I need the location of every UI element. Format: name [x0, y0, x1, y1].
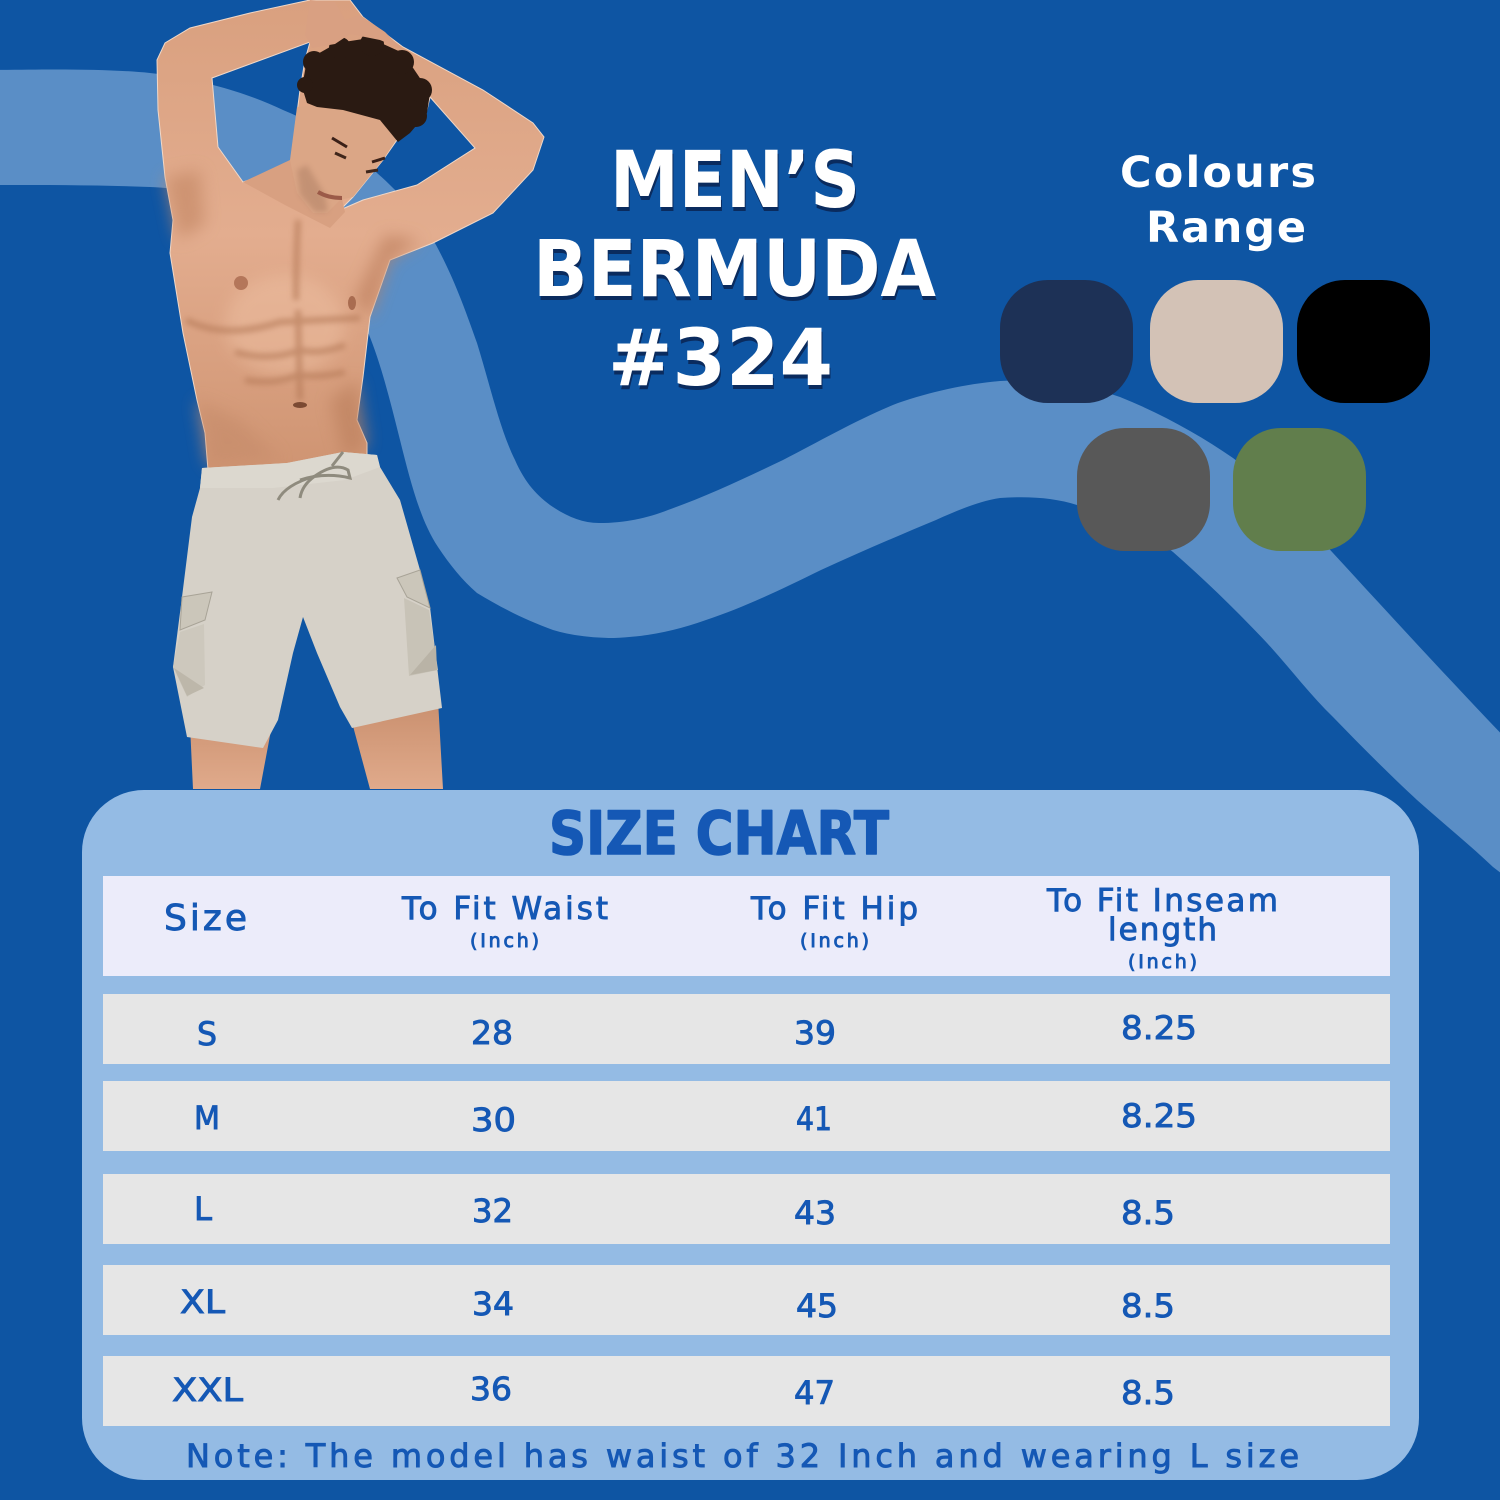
note: Note: The model has waist of 32 Inch and wearing L size — [186, 1437, 1299, 1475]
title text: #324 — [608, 314, 833, 404]
row: XL — [103, 1265, 1390, 1335]
row: S: 39 — [794, 1014, 836, 1052]
swatch: black — [1297, 280, 1430, 403]
row: XL: XL — [180, 1283, 225, 1321]
row: XXL — [103, 1356, 1390, 1426]
swatch: green — [1233, 428, 1366, 551]
title text: MEN’S — [610, 136, 860, 226]
nipples and navel — [234, 276, 356, 408]
colours range heading — [1120, 148, 1316, 253]
title shadow: #324 — [609, 318, 834, 408]
row: XXL: 36 — [470, 1370, 512, 1408]
panel background — [82, 790, 1419, 1480]
row: XL: 8.5 — [1121, 1287, 1175, 1325]
model figure in cargo shorts — [157, 0, 544, 789]
row: S — [103, 994, 1390, 1064]
swatch: navy — [1000, 280, 1133, 403]
table header row: To Fit Hip — [750, 891, 918, 927]
size chart heading: SIZE CHART — [549, 799, 889, 869]
colour swatches — [1000, 280, 1430, 551]
neck — [243, 160, 345, 228]
facial features — [297, 138, 385, 212]
decorative wave band — [0, 69, 1500, 880]
table header row: To Fit Inseam — [1046, 883, 1278, 919]
title shadow: MEN’S — [611, 140, 861, 230]
title — [533, 136, 937, 408]
face — [290, 103, 398, 213]
row: XL: 45 — [796, 1287, 838, 1325]
row: S: 8.25 — [1121, 1009, 1197, 1047]
waistband — [200, 452, 380, 488]
row: M: 8.25 — [1121, 1097, 1197, 1135]
table header row: Size — [164, 898, 247, 939]
title shadow: BERMUDA — [534, 229, 937, 319]
row: L: 43 — [794, 1194, 836, 1232]
table header row: (Inch) — [470, 930, 539, 952]
row: L: L — [194, 1190, 212, 1228]
torso and arms — [157, 0, 544, 470]
shorts — [173, 452, 442, 748]
title shadow — [534, 140, 937, 408]
row: M: 30 — [471, 1101, 516, 1139]
hair — [297, 32, 432, 142]
colours range heading: Range — [1146, 203, 1306, 253]
abdominal muscle shading — [186, 220, 360, 400]
row: L: 8.5 — [1121, 1194, 1175, 1232]
row: XXL: XXL — [172, 1371, 243, 1409]
row: M: M — [194, 1099, 220, 1137]
row: S: 28 — [471, 1014, 513, 1052]
title text: BERMUDA — [533, 225, 936, 315]
row: XXL: 47 — [794, 1374, 835, 1412]
right cargo pocket — [397, 570, 438, 676]
table header row: length — [1108, 912, 1217, 948]
panel: size chart — [82, 790, 1419, 1480]
body shading — [165, 170, 420, 465]
table header row: (Inch) — [800, 930, 869, 952]
row: XL: 34 — [472, 1285, 514, 1323]
title text — [533, 136, 936, 404]
left cargo pocket — [173, 592, 212, 697]
row: M: 41 — [796, 1100, 832, 1138]
row: XXL: 8.5 — [1121, 1374, 1175, 1412]
swatch: grey — [1077, 428, 1210, 551]
swatch: beige — [1150, 280, 1283, 403]
table header row — [103, 876, 1390, 976]
table header row: (Inch) — [1128, 951, 1197, 973]
row: M — [103, 1081, 1390, 1151]
row: S: S — [197, 1015, 217, 1053]
colours range heading: Colours — [1120, 148, 1316, 198]
hands — [305, 0, 403, 50]
drawstring — [278, 452, 350, 500]
legs — [190, 700, 443, 789]
table header row: To Fit Waist — [401, 891, 608, 927]
row: L: 32 — [472, 1192, 513, 1230]
row: L — [103, 1174, 1390, 1244]
